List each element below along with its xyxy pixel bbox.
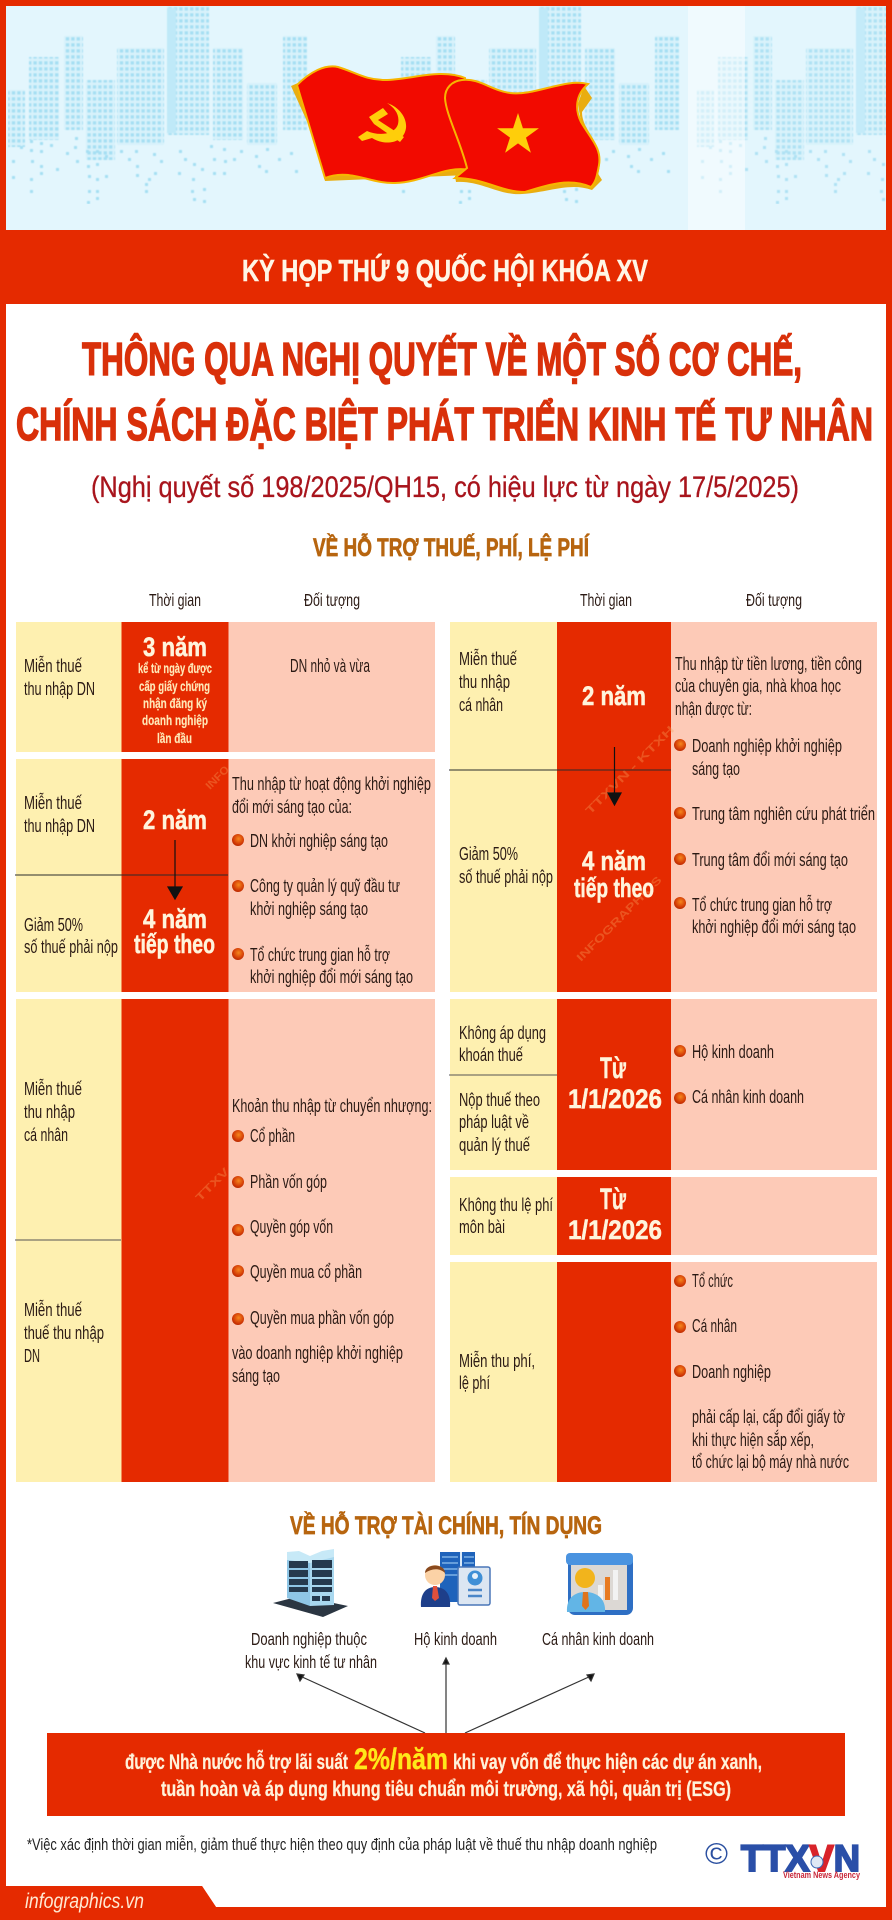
panel: right row 1 - experts and scientists: Tổ chức trung gian hỗ trợ <box>692 894 832 915</box>
panel: left row 1 - small enterprises: nhận đăng ký <box>143 696 207 711</box>
panel: left row 3 - capital transfer income: Quyền góp vốn <box>250 1217 333 1237</box>
panel: left row 3 - capital transfer income: Miễn thuế <box>24 1299 82 1320</box>
column headers right: Đối tượng <box>746 590 802 610</box>
panel: left row 3 - capital transfer income: Cổ phần <box>250 1126 295 1146</box>
panel: right row 1 - experts and scientists: cá nhân <box>459 695 503 715</box>
panel: right row 1 - experts and scientists: 4 năm <box>582 846 646 876</box>
panel: right row 1 - experts and scientists: Giảm 50% <box>459 844 518 864</box>
icon: household business person <box>421 1552 490 1607</box>
panel: right row 1 - experts and scientists: Miễn thuế <box>459 648 517 669</box>
panel: right row 4 - fee exemption: Miễn thu phí, <box>459 1350 535 1371</box>
beneficiary labels <box>245 1629 654 1672</box>
column headers right: Thời gian <box>580 590 632 610</box>
red session band <box>0 230 892 304</box>
panel: right row 2 - household businesses: Không áp dụng <box>459 1023 546 1043</box>
panel: right row 1 - experts and scientists: TTXVN - KTXH <box>584 724 677 817</box>
panel: right row 4 - fee exemption: khi thực hiện sắp xếp, <box>692 1429 814 1450</box>
panel: left row 1 - small enterprises: doanh nghiệp <box>142 713 208 728</box>
skyline background <box>8 6 892 230</box>
panel: left row 3 - capital transfer income: Phần vốn góp <box>250 1172 327 1192</box>
logo: TTXVN: © <box>705 1838 728 1871</box>
section heading: finance and credit: VỀ HỖ TRỢ TÀI CHÍNH, TÍN DỤNG <box>290 1510 602 1540</box>
panel: right row 2 - household businesses: quản lý thuế <box>459 1135 530 1155</box>
panel: left row 3 - capital transfer income: Miễn thuế <box>24 1078 82 1099</box>
panel: right row 2 - household businesses: 1/1/2026 <box>568 1084 662 1114</box>
panel: right row 1 - experts and scientists <box>449 622 877 992</box>
panel: right row 2 - household businesses: Cá nhân kinh doanh <box>692 1087 804 1107</box>
panel: left row 2 - innovative startups: đổi mới sáng tạo của: <box>232 797 352 817</box>
panel: right row 1 - experts and scientists: số thuế phải nộp <box>459 867 553 887</box>
panel: left row 1 - small enterprises: cấp giấy chứng <box>139 679 210 694</box>
footer tab: infographics.vn <box>0 1886 892 1920</box>
icon: national flag <box>445 80 602 194</box>
panel: left row 1 - small enterprises <box>16 622 435 752</box>
panel: left row 2 - innovative startups: khởi nghiệp đổi mới sáng tạo <box>250 967 413 987</box>
panel: left row 1 - small enterprises: Miễn thuế <box>24 655 82 676</box>
panel: right row 3 - license fee: 1/1/2026 <box>568 1215 662 1245</box>
panel: left row 2 - innovative startups: 4 năm <box>143 904 207 934</box>
panel: right row 4 - fee exemption <box>450 1262 877 1482</box>
panel: right row 2 - household businesses <box>449 999 877 1170</box>
session title: KỲ HỌP THỨ 9 QUỐC HỘI KHÓA XV <box>242 252 648 288</box>
panel: left row 3 - capital transfer income: thuế thu nhập <box>24 1323 104 1343</box>
callout: 2 percent interest support: được Nhà nước hỗ trợ lãi suất <box>125 1750 348 1774</box>
panel: left row 3 - capital transfer income: vào doanh nghiệp khởi nghiệp <box>232 1343 403 1363</box>
icon: party flag <box>291 66 470 183</box>
panel: right row 3 - license fee <box>450 1177 877 1255</box>
footnote: *Việc xác định thời gian miễn, giảm thuế thực hiện theo quy định của pháp luật về thuế thu nhập doanh nghiệp <box>27 1835 657 1854</box>
callout: 2 percent interest support: 2%/năm <box>354 1743 448 1776</box>
panel: left row 3 - capital transfer income: DN <box>24 1346 40 1366</box>
panel: left row 2 - innovative startups: 2 năm <box>143 805 207 835</box>
icon: office building <box>273 1549 348 1617</box>
panel: left row 1 - small enterprises: lần đầu <box>157 731 192 746</box>
logo: TTXVN: TTXVN <box>741 1838 860 1879</box>
panel: left row 1 - small enterprises: DN nhỏ và vừa <box>290 656 371 676</box>
column headers left: Đối tượng <box>304 590 360 610</box>
panel: right row 4 - fee exemption: lệ phí <box>459 1373 490 1393</box>
panel: left row 2 - innovative startups: Tổ chức trung gian hỗ trợ <box>250 944 390 965</box>
panel: right row 1 - experts and scientists: 2 năm <box>582 681 646 711</box>
panel: left row 3 - capital transfer income: Quyền mua phần vốn góp <box>250 1308 394 1328</box>
column headers left <box>149 590 360 610</box>
panel: left row 2 - innovative startups: tiếp theo <box>134 929 215 959</box>
panel: left row 1 - small enterprises: kể từ ngày được <box>138 661 212 676</box>
panel: left row 3 - capital transfer income: Khoản thu nhập từ chuyển nhượng: <box>232 1096 432 1116</box>
panel: left row 2 - innovative startups: Giảm 50% <box>24 915 83 935</box>
panel: left row 3 - capital transfer income: cá nhân <box>24 1125 68 1145</box>
panel: right row 1 - experts and scientists: thu nhập <box>459 672 510 692</box>
panel: left row 3 - capital transfer income: Quyền mua cổ phần <box>250 1262 362 1282</box>
panel: right row 2 - household businesses: khoán thuế <box>459 1045 523 1065</box>
column headers right <box>580 590 802 610</box>
panel: right row 4 - fee exemption: Doanh nghiệp <box>692 1362 771 1382</box>
panel: right row 2 - household businesses: Từ <box>600 1052 626 1085</box>
panel: right row 3 - license fee: Không thu lệ phí <box>459 1195 553 1215</box>
panel: left row 2 - innovative startups: INFO <box>204 764 232 792</box>
panel: left row 2 - innovative startups: Công ty quản lý quỹ đầu tư <box>250 876 400 896</box>
arrow: 2 years to 4 years <box>608 747 621 805</box>
arrow: 2 years to 4 years <box>168 840 182 899</box>
panel: left row 2 - innovative startups: DN khởi nghiệp sáng tạo <box>250 831 388 851</box>
main title <box>16 333 873 450</box>
panel: left row 2 - innovative startups: khởi nghiệp sáng tạo <box>250 899 368 919</box>
panel: right row 1 - experts and scientists: INFOGRAPHICS <box>575 874 664 964</box>
callout: 2 percent interest support <box>47 1733 845 1816</box>
panel: left row 2 - innovative startups: thu nhập DN <box>24 816 95 836</box>
panel: left row 3 - capital transfer income: sáng tạo <box>232 1366 280 1386</box>
panel: right row 2 - household businesses: pháp luật về <box>459 1112 529 1132</box>
panel: right row 4 - fee exemption: Tổ chức <box>692 1271 733 1291</box>
beneficiary labels: Hộ kinh doanh <box>414 1629 497 1649</box>
footer tab: infographics.vn: infographics.vn <box>25 1890 144 1913</box>
panel: left row 2 - innovative startups <box>15 759 435 992</box>
panel: right row 1 - experts and scientists: nhận được từ: <box>675 699 752 719</box>
beneficiary labels: Cá nhân kinh doanh <box>542 1629 654 1649</box>
column headers left: Thời gian <box>149 590 201 610</box>
logo: TTXVN: Vietnam News Agency <box>783 1870 861 1881</box>
panel: right row 3 - license fee: môn bài <box>459 1217 505 1237</box>
panel: right row 4 - fee exemption: Cá nhân <box>692 1316 737 1336</box>
icon: individual business presentation <box>566 1553 633 1615</box>
panel: left row 3 - capital transfer income: thu nhập <box>24 1102 75 1122</box>
panel: left row 1 - small enterprises: 3 năm <box>143 632 207 662</box>
panel: right row 1 - experts and scientists: tiếp theo <box>574 873 654 903</box>
panel: left row 2 - innovative startups: Thu nhập từ hoạt động khởi nghiệp <box>232 774 431 794</box>
header banner: city skyline and flags <box>6 6 892 230</box>
panel: left row 3 - capital transfer income: TTXV <box>194 1165 233 1204</box>
callout: 2 percent interest support: khi vay vốn để thực hiện các dự án xanh, <box>453 1751 762 1774</box>
panel: left row 2 - innovative startups: số thuế phải nộp <box>24 937 118 957</box>
panel: right row 1 - experts and scientists: sáng tạo <box>692 759 740 779</box>
panel: left row 1 - small enterprises: thu nhập DN <box>24 679 95 699</box>
callout: 2 percent interest support: tuần hoàn và áp dụng khung tiêu chuẩn môi trường, xã hội, quản trị (ESG) <box>161 1778 731 1801</box>
beneficiary labels: Doanh nghiệp thuộc <box>251 1629 367 1649</box>
panel: left row 2 - innovative startups: Miễn thuế <box>24 792 82 813</box>
panel: left row 3 - capital transfer income <box>15 999 435 1482</box>
beneficiary labels: khu vực kinh tế tư nhân <box>245 1652 377 1672</box>
panel: right row 3 - license fee: Từ <box>600 1183 626 1216</box>
section heading: tax support: VỀ HỖ TRỢ THUẾ, PHÍ, LỆ PHÍ <box>313 532 590 562</box>
panel: right row 2 - household businesses: Hộ kinh doanh <box>692 1042 774 1062</box>
arrows from support box to beneficiaries <box>297 1658 594 1733</box>
panel: right row 2 - household businesses: Nộp thuế theo <box>459 1090 540 1110</box>
